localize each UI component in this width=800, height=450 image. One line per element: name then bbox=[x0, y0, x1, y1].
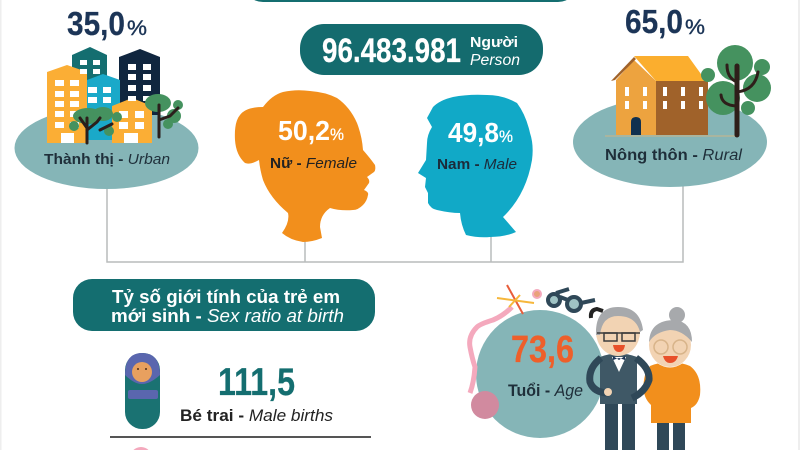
panel: female bbox=[235, 90, 375, 242]
female label: Nữ - Female bbox=[270, 156, 357, 172]
top title pill fragment bbox=[243, 0, 578, 2]
unit label: Người bbox=[470, 34, 518, 51]
woman bbox=[643, 307, 700, 450]
male label: Nam - Male bbox=[437, 157, 517, 173]
unit label bbox=[470, 34, 520, 69]
male births value: 111,5 bbox=[218, 361, 295, 404]
age circle bbox=[476, 310, 604, 438]
female percentage: 50,2 bbox=[278, 115, 330, 146]
urban percentage: 35,0 bbox=[67, 5, 125, 42]
urban label: Thành thị - Urban bbox=[44, 151, 170, 168]
panel: male births bbox=[125, 353, 333, 429]
icon: house bbox=[605, 56, 735, 137]
icon: female head bbox=[235, 90, 375, 242]
icon: baby girl head bbox=[130, 447, 152, 450]
rural percentage: % bbox=[685, 16, 705, 39]
connector lines bbox=[107, 186, 683, 262]
heading: sex ratio at birth: mới sinh - Sex ratio at birth bbox=[111, 306, 344, 326]
icon: urban trees bbox=[69, 94, 183, 143]
age value: 73,6 bbox=[511, 329, 574, 371]
urban percentage: % bbox=[127, 17, 147, 40]
male percentage: % bbox=[499, 127, 513, 146]
rural ellipse bbox=[573, 97, 767, 187]
panel: life expectancy bbox=[470, 285, 604, 438]
heading: sex ratio at birth bbox=[73, 279, 375, 331]
icon: male head bbox=[418, 95, 533, 237]
age label: Tuổi - Age bbox=[508, 382, 583, 400]
man bbox=[590, 307, 649, 450]
unit label: Person bbox=[470, 52, 520, 69]
panel: male bbox=[418, 95, 533, 237]
panel: urban bbox=[14, 5, 198, 189]
icon: city buildings bbox=[47, 47, 160, 143]
panel: rural bbox=[573, 3, 771, 187]
icon: glasses bbox=[548, 289, 603, 318]
male births label: Bé trai - Male births bbox=[180, 407, 333, 425]
illustration: elderly couple bbox=[590, 307, 700, 450]
icon: yarn ball and thread bbox=[470, 307, 512, 419]
rural percentage: 65,0 bbox=[625, 3, 683, 40]
icon: rural tree bbox=[701, 45, 771, 135]
rural label: Nông thôn - Rural bbox=[605, 147, 743, 164]
icon: knitting needles bbox=[497, 285, 541, 314]
urban ellipse bbox=[14, 107, 198, 189]
panel: total population bbox=[300, 24, 543, 75]
icon: baby boy bbox=[125, 353, 160, 429]
heading: sex ratio at birth: Tỷ số giới tính của trẻ em bbox=[112, 287, 340, 307]
male percentage: 49,8 bbox=[448, 117, 499, 148]
female percentage: % bbox=[330, 125, 344, 144]
population number: 96.483.981 bbox=[322, 32, 461, 70]
